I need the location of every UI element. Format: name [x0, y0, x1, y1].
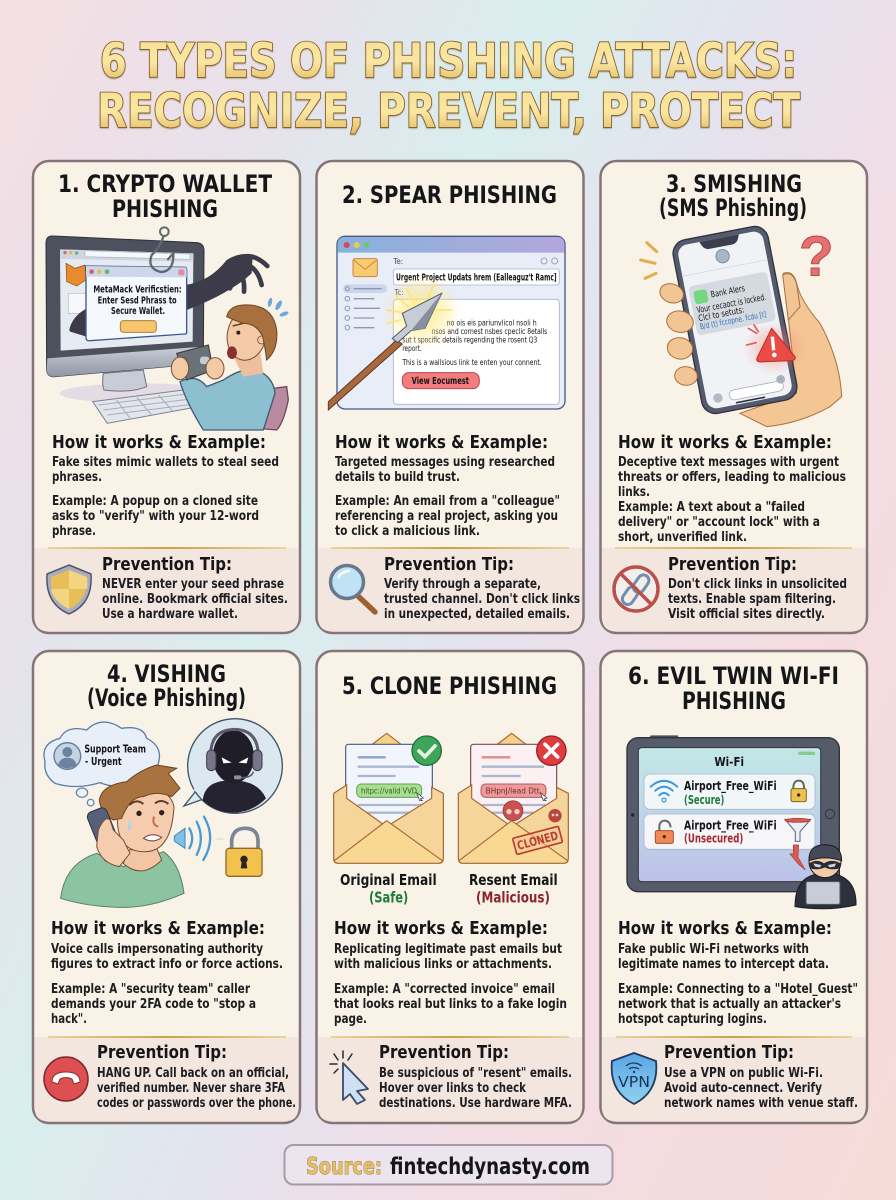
- prevention tip text: Use a hardware wallet.: [102, 606, 238, 622]
- cloned stamp: CLONED: [516, 828, 560, 853]
- how it works text: legitimate names to intercept data.: [618, 956, 829, 972]
- resent envelope: [458, 733, 568, 863]
- how it works text: [334, 919, 567, 1027]
- how it works text: How it works & Example:: [335, 433, 548, 453]
- thought cloud: [44, 722, 159, 806]
- how it works text: network that is actually an attacker's: [618, 996, 841, 1012]
- how it works text: [618, 919, 858, 1027]
- how it works text: Fake sites mimic wallets to steal seed: [52, 454, 279, 470]
- prevention tip text: Hover over links to check: [379, 1080, 527, 1096]
- illustration: tablet wi-fi list with hacker: Wi-Fi: [714, 755, 744, 769]
- prevention tip text: Prevention Tip:: [668, 555, 797, 575]
- resent envelope: BHpnJ/lead Dtt: [486, 786, 540, 796]
- popup message: [93, 285, 182, 332]
- heading: vishing: (Voice Phishing): [87, 684, 246, 712]
- icon: magnifying glass: [330, 566, 375, 612]
- resent email label: Resent Email: [469, 871, 558, 889]
- unsecured network row: [644, 814, 815, 849]
- icon: hang up phone: [44, 1057, 88, 1101]
- how it works text: Voice calls impersonating authority: [51, 941, 263, 957]
- prevention tip text: HANG UP. Call back on an official,: [97, 1065, 289, 1081]
- illustration: email window pierced by spear: [328, 236, 565, 410]
- how it works text: delivery" or "account lock" with a: [618, 514, 820, 530]
- thought cloud: - Urgent: [85, 755, 122, 768]
- how it works text: Example: A text about a "failed: [618, 499, 805, 515]
- how it works text: How it works & Example:: [618, 919, 832, 939]
- heading: smishing: [659, 170, 807, 222]
- how it works text: Example: A "security team" caller: [51, 981, 250, 997]
- how it works text: demands your 2FA code to "stop a: [51, 996, 256, 1012]
- how it works text: hotspot capturing logins.: [618, 1011, 767, 1027]
- illustration: man on phone with hooded caller: [44, 719, 282, 907]
- hacker at laptop: [795, 845, 856, 909]
- illustration: monitor, dark hand and worried user: [46, 227, 289, 430]
- how it works text: with malicious links or attachments.: [334, 956, 552, 972]
- heading: evil twin wi-fi phishing: 6. EVIL TWIN WI-FI: [628, 662, 839, 690]
- prevention tip text: [102, 555, 288, 622]
- heading: crypto wallet phishing: [58, 170, 272, 223]
- how it works text: phrases.: [52, 469, 102, 485]
- how it works text: Example: Connecting to a "Hotel_Guest": [618, 981, 858, 997]
- original email label: Original Email: [340, 871, 437, 889]
- sms message text: Vour cecaoct is locked.: [696, 293, 767, 316]
- prevention tip text: [664, 1043, 858, 1111]
- email body text: nsos and cornest nsbes cpeclic 8etalls: [432, 327, 548, 336]
- view document button: [402, 373, 479, 389]
- prevention tip text: Prevention Tip:: [97, 1043, 227, 1063]
- source footer: [284, 1145, 612, 1184]
- heading: vishing: 4. VISHING: [107, 660, 226, 688]
- prevention tip text: in unexpected, detailed emails.: [384, 606, 570, 622]
- how it works text: threats or offers, leading to malicious: [618, 469, 846, 485]
- unsecured network row: (Unsecured): [684, 832, 743, 846]
- how it works text: Targeted messages using researched: [335, 454, 555, 470]
- how it works text: short, unverified link.: [618, 529, 747, 545]
- heading: evil twin wi-fi phishing: PHISHING: [682, 687, 786, 715]
- source footer: Source:: [306, 1154, 382, 1180]
- prevention tip text: verified number. Never share 3FA: [97, 1080, 285, 1096]
- prevention tip text: codes or passwords over the phone.: [97, 1095, 296, 1111]
- how it works text: asks to "verify" with your 12-word: [52, 508, 259, 524]
- prevention tip text: Verify through a separate,: [384, 576, 541, 592]
- heading: smishing: 3. SMISHING: [666, 170, 802, 198]
- original envelope: [334, 733, 443, 863]
- original email label: [340, 871, 437, 906]
- how it works text: How it works & Example:: [52, 433, 266, 453]
- icon: vpn shield: [612, 1053, 656, 1104]
- how it works text: to click a malicious link.: [335, 523, 480, 539]
- thought cloud: Support Team: [84, 743, 146, 756]
- panel: spear phishing: [316, 161, 584, 633]
- prevention tip text: trusted channel. Don't click links: [384, 591, 580, 607]
- source footer: fintechdynasty.com: [390, 1154, 590, 1180]
- sms message text: B/d (t) fccopne. fcdu [t]: [699, 310, 767, 331]
- panel: vishing: [33, 651, 300, 1123]
- how it works text: Deceptive text messages with urgent: [618, 454, 839, 470]
- heading: vishing: [87, 660, 246, 712]
- icon: cursor click: [330, 1051, 368, 1104]
- how it works text: phrase.: [52, 523, 96, 539]
- icon: gold shield: [47, 565, 91, 614]
- illustration: hand holding phone with fake bank alert: [641, 224, 842, 427]
- how it works text: Fake public Wi-Fi networks with: [618, 941, 809, 957]
- prevention tip text: [97, 1043, 296, 1111]
- panel: evil twin wi-fi phishing: [600, 651, 867, 1123]
- prevention tip text: Prevention Tip:: [384, 555, 514, 575]
- secure network row: (Secure): [684, 793, 724, 807]
- prevention tip text: destinations. Use hardware MFA.: [379, 1095, 572, 1111]
- how it works text: links.: [618, 484, 650, 500]
- how it works text: Replicating legitimate past emails but: [334, 941, 562, 957]
- how it works text: Example: A popup on a cloned site: [52, 493, 258, 509]
- prevention tip text: Be suspicious of "resent" emails.: [379, 1065, 572, 1081]
- heading: smishing: (SMS Phishing): [659, 194, 807, 222]
- illustration: tablet wi-fi list with hacker: [627, 735, 856, 909]
- view document button: View Eocumest: [412, 376, 469, 387]
- illustration: email window pierced by spear: Tc:: [393, 288, 404, 297]
- how it works text: hack".: [51, 1011, 87, 1027]
- prevention tip text: online. Bookmark official sites.: [102, 591, 288, 607]
- panel: clone phishing: [316, 651, 584, 1123]
- heading: clone phishing: 5. CLONE PHISHING: [342, 672, 557, 700]
- prevention tip text: NEVER enter your seed phrase: [102, 576, 284, 592]
- heading: crypto wallet phishing: 1. CRYPTO WALLET: [58, 170, 272, 198]
- prevention tip text: Avoid auto-cennect. Verify: [664, 1080, 822, 1096]
- how it works text: How it works & Example:: [618, 433, 832, 453]
- prevention tip text: Use a VPN on public Wi-Fi.: [664, 1065, 823, 1081]
- prevention tip text: [379, 1043, 572, 1111]
- panel: crypto wallet phishing: [33, 161, 300, 633]
- resent email label: [469, 871, 558, 906]
- email body text: This is a wallsious link te enten your connent.: [401, 358, 542, 367]
- how it works text: [618, 433, 846, 545]
- how it works text: that looks real but links to a fake login: [334, 996, 567, 1012]
- how it works text: How it works & Example:: [334, 919, 548, 939]
- prevention tip text: Don't click links in unsolicited: [668, 576, 847, 592]
- prevention tip text: Visit official sites directly.: [668, 606, 825, 622]
- illustration: original and cloned envelopes: [334, 733, 568, 906]
- prevention tip text: network names with venue staff.: [664, 1095, 858, 1111]
- prevention tip text: Prevention Tip:: [379, 1043, 509, 1063]
- resent email label: (Malicious): [476, 888, 550, 906]
- illustration: email window pierced by spear: Te:: [392, 257, 403, 266]
- original envelope: hltpc://valid VVD: [361, 786, 417, 796]
- secure network row: [644, 774, 815, 809]
- icon: vpn shield: VPN: [618, 1073, 650, 1091]
- title: [97, 34, 800, 139]
- how it works text: Example: An email from a "colleague": [335, 493, 560, 509]
- popup message: Secure Wallet.: [111, 306, 165, 317]
- prevention tip text: Prevention Tip:: [664, 1043, 794, 1063]
- how it works text: [51, 919, 283, 1027]
- title: 6 TYPES OF PHISHING ATTACKS:: [100, 34, 797, 89]
- prevention tip text: texts. Enable spam filtering.: [668, 591, 836, 607]
- sms message text: Bank Alers: [710, 284, 746, 300]
- how it works text: details to build trust.: [335, 469, 460, 485]
- how it works text: referencing a real project, asking you: [335, 508, 558, 524]
- heading: spear phishing: 2. SPEAR PHISHING: [342, 181, 557, 209]
- how it works text: page.: [334, 1011, 367, 1027]
- popup message: Enter Sesd Phrass to: [98, 295, 177, 306]
- question mark: ?: [799, 226, 834, 289]
- prevention tip text: Prevention Tip:: [102, 555, 232, 575]
- email body text: report.: [402, 344, 422, 353]
- email body text: [401, 319, 548, 367]
- how it works text: [335, 433, 560, 539]
- heading: crypto wallet phishing: PHISHING: [112, 195, 218, 223]
- email body text: sut t spocific details regending the rosent Q3: [402, 336, 537, 345]
- email subject: Urgent Project Updats hrem (Ealleaguz't Ramc]: [396, 273, 557, 284]
- secure network row: Airport_Free_WiFi: [684, 779, 777, 794]
- email body text: no ois eis pariunvlicol nsoli h: [447, 319, 537, 328]
- prevention tip text: [668, 555, 847, 622]
- heading: evil twin wi-fi phishing: [628, 662, 839, 715]
- how it works text: figures to extract info or force actions.: [51, 956, 283, 972]
- panel: smishing: [600, 161, 867, 633]
- sms message text: [694, 280, 770, 331]
- popup message: MetaMack Verificstien:: [93, 285, 182, 296]
- how it works text: How it works & Example:: [51, 919, 265, 939]
- unsecured network row: Airport_Free_WiFi: [684, 818, 777, 833]
- icon: blocked link: [614, 567, 658, 611]
- original email label: (Safe): [369, 888, 408, 906]
- title: RECOGNIZE, PREVENT, PROTECT: [97, 84, 800, 139]
- how it works text: [52, 433, 279, 539]
- prevention tip text: [384, 555, 580, 622]
- how it works text: Example: A "corrected invoice" email: [334, 981, 555, 997]
- sms message text: Clcl to setuts:: [698, 305, 745, 324]
